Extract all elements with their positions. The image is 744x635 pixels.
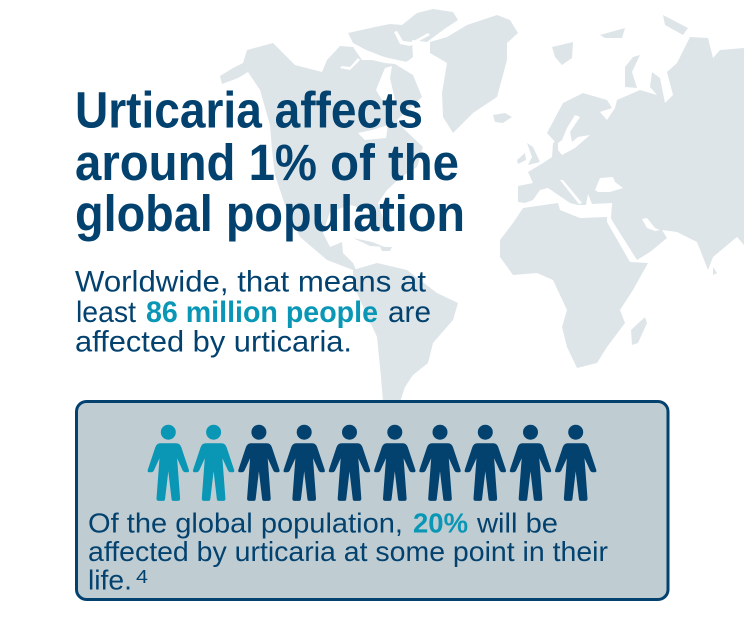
map: inland seas and channels	[340, 31, 660, 231]
title: global population	[75, 185, 465, 242]
panel text: will be	[476, 508, 558, 538]
panel text: affected by urticaria at some point in their	[88, 536, 608, 567]
map: other islands	[517, 15, 717, 275]
panel text: 20%	[413, 508, 468, 538]
text block: 86 million people: 86 million people	[146, 296, 378, 329]
text block: 86 million people	[75, 266, 431, 358]
map: Madagascar	[631, 317, 647, 345]
title	[75, 82, 465, 242]
map: Caribbean islands	[353, 238, 392, 251]
map: Arctic Canada islands	[348, 9, 458, 62]
title: around 1% of the	[75, 134, 459, 191]
panel: 20% statistic	[76, 402, 668, 600]
map: Iceland	[493, 113, 512, 123]
pictogram: ten people, two highlighted	[148, 425, 596, 501]
world map background	[220, 9, 744, 402]
map: Africa	[500, 203, 648, 368]
text block: 86 million people: are	[388, 296, 431, 329]
map: Greenland	[430, 15, 518, 133]
panel text: 4	[136, 567, 148, 587]
panel text: life.	[88, 564, 132, 596]
map: Eurasia	[518, 37, 744, 270]
map: South America	[353, 263, 458, 402]
text block: 86 million people: least	[76, 296, 137, 329]
map: North America	[220, 43, 423, 272]
title: Urticaria affects	[75, 82, 423, 138]
text block: 86 million people: Worldwide, that means at	[75, 266, 427, 298]
panel text	[88, 508, 608, 596]
panel text: Of the global population,	[88, 508, 403, 538]
text block: 86 million people: affected by urticaria.	[75, 326, 352, 358]
